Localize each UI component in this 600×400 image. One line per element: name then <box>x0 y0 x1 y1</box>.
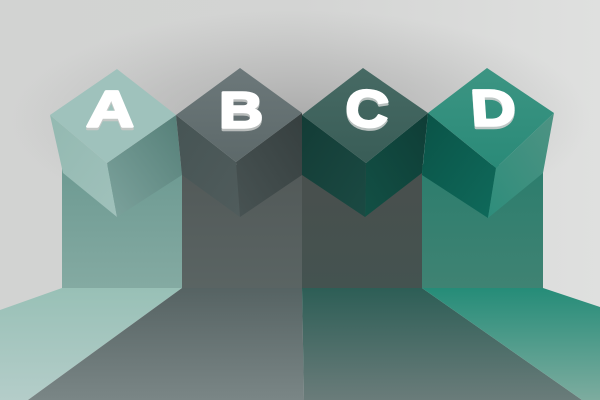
panel: floor strip C <box>302 288 582 400</box>
panel: wall strip C <box>302 165 422 288</box>
panel: wall strip A <box>62 165 182 288</box>
panel: wall strip B <box>182 165 302 288</box>
letter C: C <box>343 77 391 139</box>
panel: floor strip D <box>422 288 600 400</box>
letter A: A <box>85 82 136 140</box>
cube A <box>50 69 182 217</box>
cube C <box>302 68 428 217</box>
letter C: C <box>343 80 391 142</box>
letter B: B <box>219 81 263 138</box>
panel: floor strip B <box>28 288 304 400</box>
panel: wall strip D <box>422 165 543 288</box>
panel: floor strip A <box>0 288 182 400</box>
letter B: B <box>219 84 263 141</box>
letter D: D <box>469 82 518 140</box>
letter D: D <box>469 80 518 137</box>
letter A: A <box>85 80 136 138</box>
cube D <box>422 68 554 218</box>
cube B <box>176 68 302 217</box>
